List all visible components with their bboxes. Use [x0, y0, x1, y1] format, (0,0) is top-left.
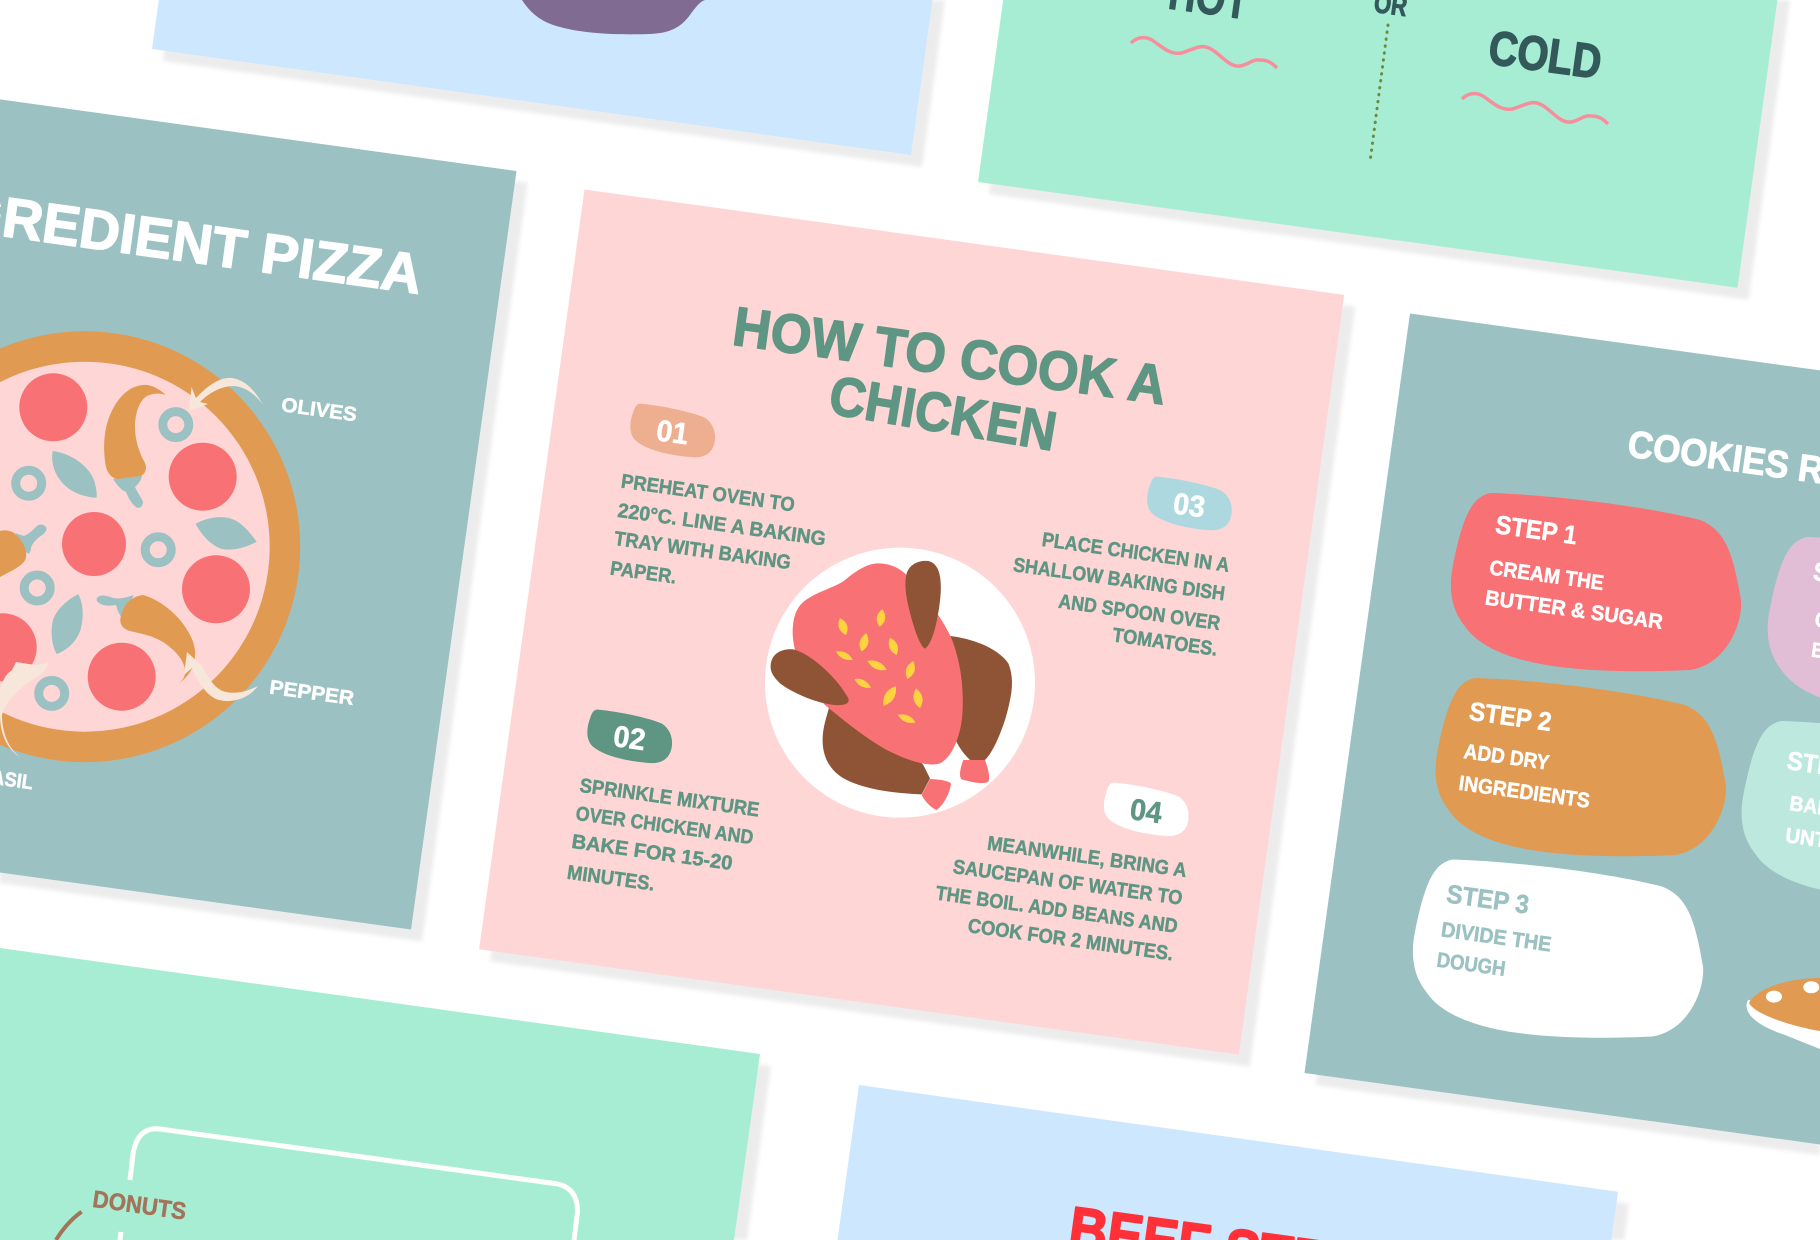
title: how to cook a chicken: HOW TO COOK A — [729, 295, 1170, 416]
label: olives: OLIVES — [280, 394, 358, 426]
panel: hot or cold card — [978, 0, 1790, 300]
step 01 text: 220°C. LINE A BAKING — [616, 500, 827, 550]
step 1 card — [1451, 493, 1741, 671]
step 02 text: MINUTES. — [566, 862, 656, 896]
donut curve — [56, 1212, 82, 1240]
step 03 text: AND SPOON OVER — [1057, 591, 1222, 635]
step 03 text — [1012, 529, 1231, 661]
step 03 badge: 03 — [1171, 487, 1207, 524]
panel: how to cook a chicken — [479, 190, 1355, 1067]
label: donuts: DONUTS — [91, 1186, 188, 1226]
step 04 text: COOK FOR 2 MINUTES. — [966, 915, 1174, 965]
step 01 text: TRAY WITH BAKING — [613, 528, 792, 574]
step 5 card — [1742, 721, 1820, 899]
step 04 text — [934, 833, 1188, 965]
step 01 text — [609, 471, 827, 589]
panel: ingredient pizza card — [0, 99, 527, 941]
illustration: roast chicken on white plate — [765, 548, 1035, 818]
step 03 text: PLACE CHICKEN IN A — [1041, 529, 1231, 577]
step 03 text: SHALLOW BAKING DISH — [1012, 554, 1226, 605]
panel: beef stew card — [838, 1085, 1629, 1240]
arrow: basil — [0, 662, 48, 757]
arrow: pepper — [184, 652, 258, 701]
step 04 text: SAUCEPAN OF WATER TO — [952, 856, 1184, 910]
step 04 badge — [1101, 781, 1192, 839]
illustration: pizza — [0, 331, 300, 762]
step 01 text: PAPER. — [609, 558, 678, 589]
label: pepper: PEPPER — [268, 677, 356, 710]
step 1 card: CREAM THE — [1488, 556, 1605, 595]
heading: cold: COLD — [1485, 22, 1605, 90]
wavy underline: hot — [1131, 38, 1277, 68]
step 04 text: THE BOIL. ADD BEANS AND — [934, 883, 1179, 938]
step 01 text: PREHEAT OVEN TO — [620, 471, 796, 517]
arrow: olives — [189, 378, 263, 411]
title: how to cook a chicken: CHICKEN — [825, 364, 1061, 463]
step 02 text: SPRINKLE MIXTURE — [578, 775, 761, 822]
step 02 badge: 02 — [611, 720, 648, 757]
step 01 badge: 01 — [654, 414, 691, 451]
wavy underline: cold — [1462, 94, 1608, 124]
step 2 card: INGREDIENTS — [1457, 772, 1591, 813]
step 3 card: DIVIDE THE — [1440, 918, 1553, 957]
purple bowl shape — [522, 0, 706, 34]
step 2 card: ADD DRY — [1462, 740, 1551, 775]
panel: top blue card — [152, 0, 945, 167]
step 1 card: BUTTER & SUGAR — [1484, 587, 1664, 634]
step 01 badge — [627, 402, 719, 460]
icon: cookie — [1747, 978, 1820, 1049]
step 03 text: TOMATOES. — [1111, 624, 1219, 661]
step 03 badge — [1144, 475, 1235, 533]
step 02 text: BAKE FOR 15-20 — [570, 831, 734, 875]
step 2 card: STEP 2 — [1467, 696, 1553, 737]
step 3 card: DOUGH — [1435, 949, 1507, 981]
step 1 card: STEP 1 — [1494, 509, 1579, 550]
step 04 text: MEANWHILE, BRING A — [986, 833, 1188, 882]
white rounded outline frame — [120, 1129, 578, 1240]
step 02 badge — [584, 708, 676, 766]
step 02 text: OVER CHICKEN AND — [574, 803, 755, 849]
panel: cookies recipe card — [1304, 314, 1820, 1155]
step 2 card — [1436, 678, 1726, 856]
step 3 card: STEP 3 — [1445, 879, 1531, 920]
step 4 card — [1768, 537, 1820, 715]
dotted divider — [1370, 25, 1388, 162]
panel: donuts card — [0, 948, 771, 1240]
step 02 text — [566, 775, 761, 896]
step 04 badge: 04 — [1128, 793, 1164, 830]
step 3 card — [1413, 860, 1703, 1038]
